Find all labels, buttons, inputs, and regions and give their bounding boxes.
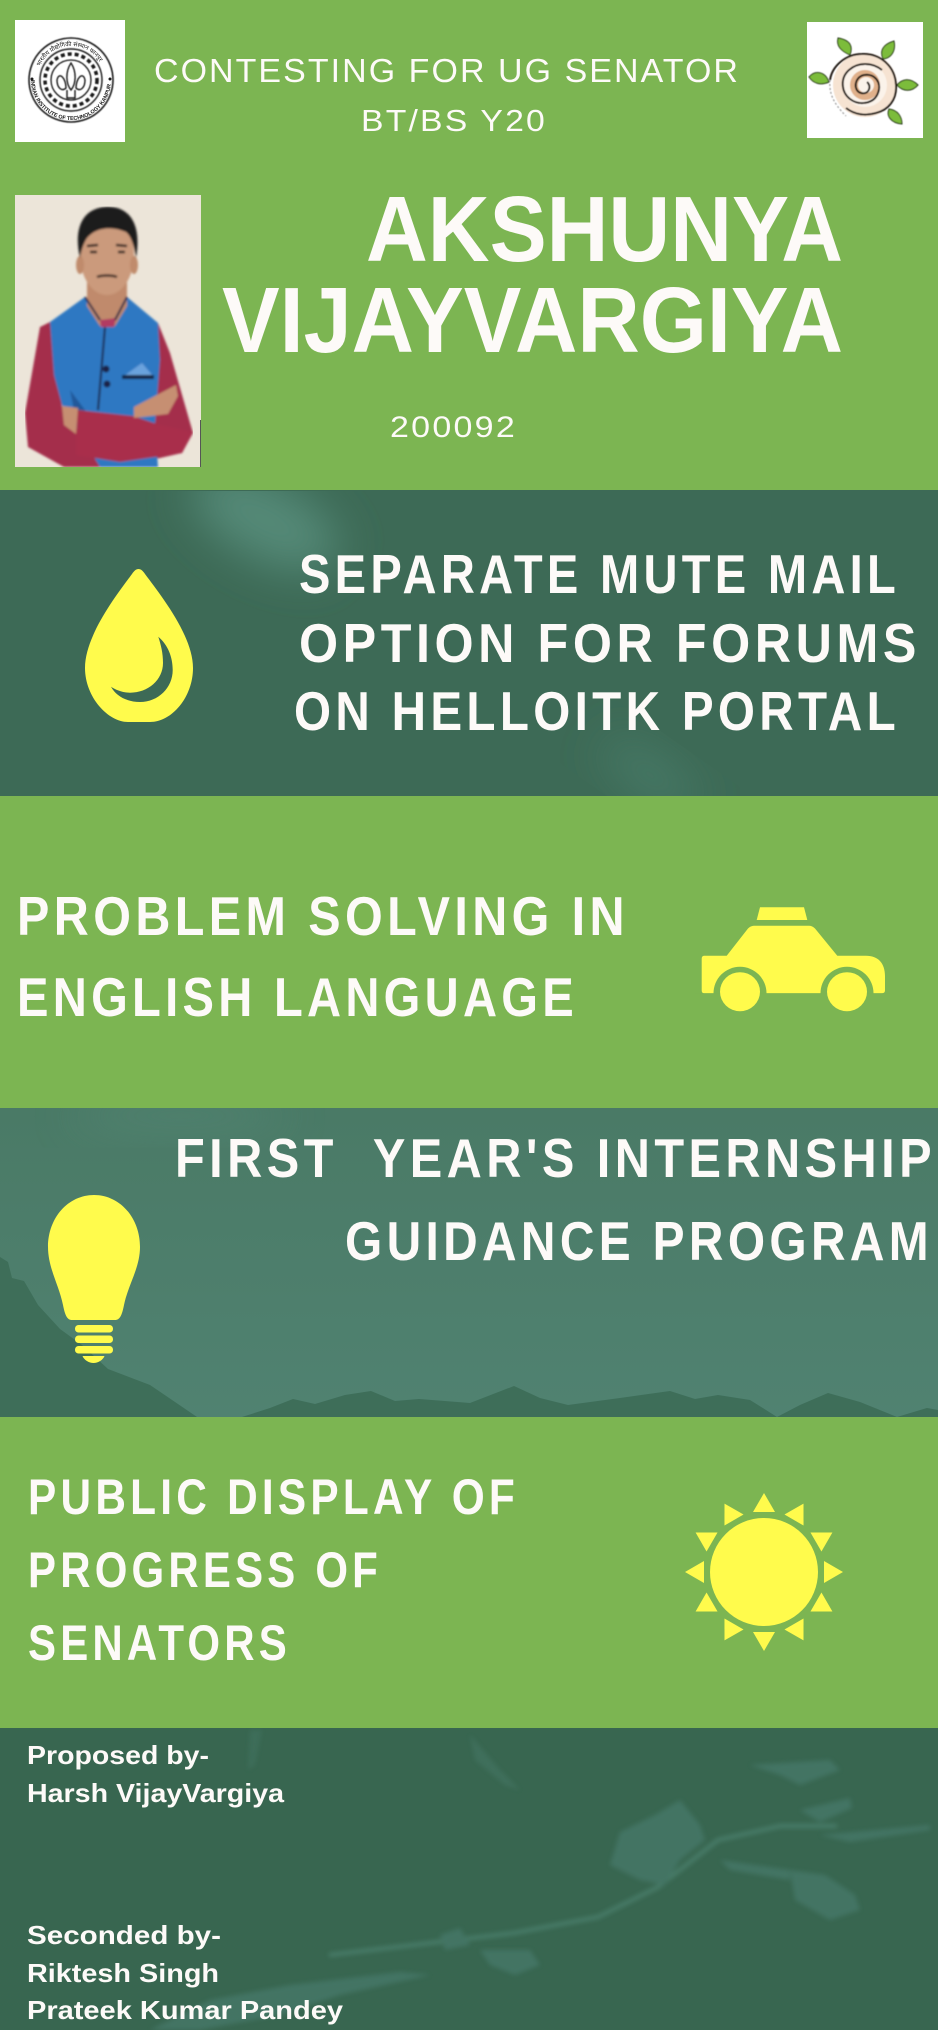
icon: water drop: [85, 569, 193, 722]
text: public display heading: PUBLIC DISPLAY OF: [28, 1469, 519, 1525]
logo: spiral with leaves: [807, 22, 923, 138]
text: seconded by: Seconded by-: [27, 1920, 221, 1950]
illustration: mountains: [0, 1257, 938, 1417]
text: mute mail heading: [294, 543, 921, 742]
text: roll number: 200092: [390, 411, 517, 444]
heading: contesting for UG senator: BT/BS Y20: [361, 103, 547, 138]
text: problem solving heading: ENGLISH LANGUAGE: [17, 966, 578, 1028]
heading: contesting for UG senator: CONTESTING FOR UG SENATOR: [154, 52, 740, 89]
heading: candidate name: VIJAYVARGIYA: [222, 268, 843, 372]
text: proposed by: Harsh VijayVargiya: [27, 1778, 285, 1808]
panel: mute mail proposal: [0, 490, 938, 796]
panel: header background: [0, 0, 938, 490]
panel: public display proposal: [0, 1417, 938, 1728]
text: public display heading: PROGRESS OF: [28, 1542, 382, 1598]
text: problem solving heading: [17, 885, 629, 1028]
text: internship heading: [175, 1127, 936, 1272]
text: proposed by: Proposed by-: [27, 1740, 209, 1770]
logo: IIT Kanpur seal: [15, 20, 125, 142]
heading: candidate name: AKSHUNYA: [366, 177, 843, 281]
text: public display heading: SENATORS: [28, 1615, 291, 1671]
text: seconded by: Riktesh Singh: [27, 1958, 219, 1988]
text: seconded by: [27, 1920, 344, 2025]
text: problem solving heading: PROBLEM SOLVING IN: [17, 885, 629, 947]
heading: contesting for UG senator: [154, 52, 740, 138]
icon: light bulb: [48, 1195, 140, 1363]
logo: IIT Kanpur seal: भारतीय प्रौद्योगिकी संस्थान कानपुर: [36, 40, 103, 65]
photo: candidate portrait: [15, 195, 201, 467]
text: public display heading: [28, 1469, 519, 1671]
panel: footer credits: [0, 1728, 938, 2030]
icon: taxi: [695, 907, 890, 1023]
text: seconded by: Prateek Kumar Pandey: [27, 1995, 344, 2025]
panel: problem solving proposal: [0, 796, 938, 1108]
heading: candidate name: [222, 177, 843, 372]
text: proposed by: [27, 1740, 285, 1808]
panel: internship proposal: [0, 1104, 938, 1417]
illustration: aerial road texture: [150, 1730, 930, 2030]
logo: IIT Kanpur seal: INDIAN INSTITUTE OF TECHNOLOGY KANPUR: [31, 80, 111, 120]
icon: sun: [685, 1493, 843, 1651]
